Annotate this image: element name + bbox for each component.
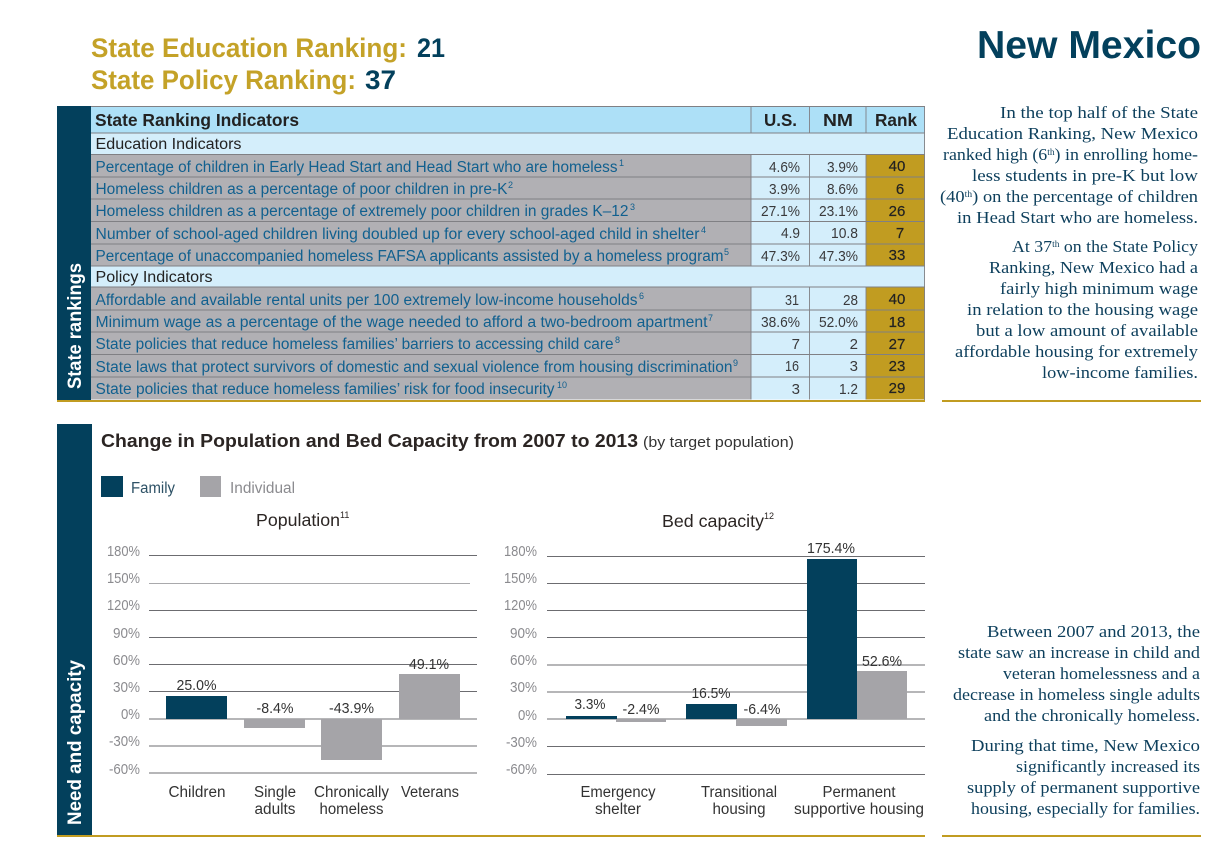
indicator: early head start: 1: [619, 158, 624, 168]
heading: state rankings: 21: [417, 33, 445, 63]
indicator: child care: 7: [792, 336, 800, 353]
text block: state rankings commentary: fairly high minimum wage: [1000, 279, 1198, 298]
indicator: early head start: 4.6%: [769, 159, 800, 176]
indicator: child care: 2: [850, 336, 858, 353]
value labels: 25.0%: [176, 677, 216, 694]
indicator: FAFSA: 5: [724, 247, 729, 257]
category labels: Emergency: [580, 784, 656, 801]
y axis labels: 150%: [504, 570, 537, 587]
indicator: child care: [96, 335, 905, 353]
text block: state rankings commentary: (40: [940, 187, 963, 206]
indicator: food insecurity: State policies that reduce homeless families’ risk for food insecurity: [96, 381, 555, 398]
legend: Individual: [230, 480, 295, 497]
category labels: homeless: [320, 801, 384, 818]
text block: need and capacity commentary: [953, 622, 1201, 818]
y axis labels: -30%: [109, 733, 140, 750]
text block: need and capacity commentary: housing, especially for families.: [971, 799, 1200, 818]
chart title: Population: 11: [340, 510, 349, 520]
indicator: survivors: 3: [850, 358, 858, 375]
indicator: food insecurity: 29: [889, 380, 905, 397]
text block: need and capacity commentary: Between 2007 and 2013, the: [987, 622, 1200, 641]
category labels: Veterans: [401, 784, 459, 801]
indicator: pre-K: [96, 180, 904, 198]
text block: state rankings commentary: in Head Start who are homeless.: [957, 208, 1198, 227]
indicator: grades K-12: 26: [889, 203, 905, 220]
y axis labels: [107, 543, 140, 778]
indicator: rental units: [96, 291, 905, 309]
text block: state rankings commentary: the State Policy: [1086, 237, 1193, 256]
value labels: [574, 540, 902, 718]
indicator: early head start: [96, 158, 905, 176]
heading: state rankings: State Policy Ranking:: [91, 65, 356, 95]
indicator: grades K-12: 3: [630, 202, 635, 212]
text block: state rankings commentary: ): [1055, 145, 1061, 164]
y axis labels: 150%: [107, 570, 140, 587]
chart heading: (by target population): [643, 434, 794, 451]
table header row: NM: [823, 110, 853, 130]
chart title: Bed capacity: Bed capacity: [662, 511, 764, 531]
bar chart: bed capacity: [504, 511, 925, 818]
indicator: grades K-12: [96, 202, 905, 220]
y axis labels: 0%: [121, 706, 140, 723]
heading: state rankings: State Education Ranking:: [91, 33, 407, 63]
indicator: doubled up: Number of school-aged children living doubled up for every school-aged child in shelter: [96, 226, 700, 243]
panel: state rankings table: [57, 106, 925, 402]
text block: state rankings commentary: less students in pre-K but low: [972, 166, 1199, 185]
bars: [566, 559, 907, 726]
indicator: grades K-12: Homeless children as a percentage of extremely poor children in grades K–12: [96, 203, 628, 220]
indicator: doubled up: 4.9: [781, 225, 800, 242]
category labels: supportive housing: [794, 801, 924, 818]
y axis labels: 0%: [518, 707, 537, 724]
value labels: -6.4%: [744, 701, 780, 718]
text block: need and capacity commentary: decrease in homeless single adults: [953, 685, 1200, 704]
indicator: survivors: State laws that protect survivors of domestic and sexual violence from housing discrimination: [96, 359, 732, 376]
text block: need and capacity commentary: veteran homelessness and a: [1003, 664, 1200, 683]
indicator: pre-K: 2: [508, 180, 513, 190]
text block: state rankings commentary: but a low amount of available: [976, 321, 1198, 340]
y axis labels: 180%: [107, 543, 140, 560]
chart heading: Change in Population and Bed Capacity from 2007 to 2013: [101, 430, 638, 451]
chart title: Bed capacity: 12: [764, 511, 774, 521]
indicator: food insecurity: 10: [557, 380, 567, 390]
indicator: survivors: 16: [785, 358, 799, 375]
category labels: Single: [254, 784, 296, 801]
sidebar: Need and capacity: Need and capacity: [65, 660, 86, 825]
heading: state rankings: [91, 33, 445, 95]
table header row: U.S.: [764, 110, 797, 130]
heading: state rankings: 37: [365, 65, 396, 95]
text block: state rankings commentary: ): [972, 187, 978, 206]
indicator: grades K-12: 23.1%: [819, 203, 858, 220]
text block: state rankings commentary: in relation to the housing wage: [967, 300, 1198, 319]
text block: need and capacity commentary: supply of permanent supportive: [967, 778, 1200, 797]
text block: state rankings commentary: [940, 103, 1199, 382]
indicator: rental units: 40: [889, 291, 905, 308]
indicator: FAFSA: Percentage of unaccompanied homeless FAFSA applicants assisted by a homeless program: [96, 248, 724, 265]
indicator: pre-K: 6: [896, 181, 904, 198]
value labels: [176, 656, 449, 717]
indicator: food insecurity: 3: [792, 381, 800, 398]
table header row: State Ranking Indicators: [95, 110, 299, 130]
value labels: 3.3%: [574, 696, 606, 713]
text block: state rankings commentary: th: [1047, 147, 1055, 157]
value labels: -2.4%: [622, 701, 660, 718]
value labels: -43.9%: [329, 700, 374, 717]
indicator: doubled up: [96, 225, 904, 243]
indicator: pre-K: Homeless children as a percentage of poor children in pre-K: [96, 181, 508, 198]
indicator: child care: 27: [889, 336, 905, 353]
indicator: minimum wage: 52.0%: [819, 314, 858, 331]
section label: Policy Indicators: Policy Indicators: [96, 269, 213, 286]
indicator: early head start: Percentage of children in Early Head Start and Head Start who are homeless: [96, 159, 618, 176]
text block: state rankings commentary: th: [965, 189, 973, 199]
y axis labels: 90%: [113, 625, 140, 642]
indicator: early head start: 3.9%: [827, 159, 858, 176]
indicator: pre-K: 8.6%: [827, 181, 858, 198]
indicator: rental units: 6: [639, 291, 644, 301]
sidebar: State rankings: [57, 106, 91, 400]
legend: Family: [131, 480, 175, 497]
text block: state rankings commentary: ranked high (6: [943, 145, 1042, 164]
chart title: Population: Population: [256, 510, 340, 530]
section label: Education Indicators: Education Indicators: [96, 136, 242, 153]
panel: need and capacity: [57, 424, 925, 837]
text block: state rankings commentary: Ranking, New Mexico had a: [989, 258, 1198, 277]
y axis labels: 30%: [113, 679, 140, 696]
text block: state rankings commentary: on: [1059, 237, 1082, 256]
indicator: minimum wage: 18: [889, 314, 905, 331]
y axis labels: 120%: [107, 597, 140, 614]
y axis labels: -60%: [506, 761, 537, 778]
text block: state rankings commentary: Education Ranking, New Mexico: [947, 124, 1198, 143]
indicator: early head start: 40: [889, 158, 905, 175]
text block: state rankings commentary: low-income families.: [1042, 363, 1198, 382]
category labels: [580, 784, 924, 818]
indicator: rental units: Affordable and available rental units per 100 extremely low-income households: [96, 292, 638, 309]
text block: state rankings commentary: th: [1052, 239, 1060, 249]
indicator: minimum wage: 38.6%: [761, 314, 800, 331]
indicator: FAFSA: 33: [889, 247, 905, 264]
text block: need and capacity commentary: state saw an increase in child and: [958, 643, 1201, 662]
text block: need and capacity commentary: During that time, New Mexico: [971, 736, 1200, 755]
y axis labels: 120%: [504, 597, 537, 614]
indicator: FAFSA: 47.3%: [819, 248, 858, 265]
y axis labels: 90%: [510, 625, 537, 642]
title: New Mexico: New Mexico: [977, 24, 1201, 67]
category labels: [168, 784, 459, 818]
indicator: rental units: 31: [785, 292, 799, 309]
category labels: Chronically: [314, 784, 389, 801]
value labels: 175.4%: [807, 540, 855, 557]
bars: [166, 674, 460, 760]
category labels: housing: [712, 801, 766, 818]
y axis labels: 30%: [510, 679, 537, 696]
y axis labels: [504, 543, 537, 778]
indicator: child care: 8: [615, 335, 620, 345]
indicator: FAFSA: 47.3%: [761, 248, 800, 265]
y axis labels: -30%: [506, 734, 537, 751]
y axis labels: 180%: [504, 543, 537, 560]
y axis labels: 60%: [113, 652, 140, 669]
text block: state rankings commentary: In the top half of the State: [1000, 103, 1198, 122]
text block: state rankings commentary: At 37: [1012, 237, 1050, 256]
indicator: survivors: 23: [889, 358, 905, 375]
text block: state rankings commentary: in enrolling home-: [1065, 145, 1191, 164]
indicator: minimum wage: 7: [708, 313, 713, 323]
value labels: -8.4%: [256, 700, 294, 717]
indicator: rental units: 28: [843, 292, 858, 309]
text block: state rankings commentary: on the percentage of children: [983, 187, 1181, 206]
indicator: child care: State policies that reduce homeless families’ barriers to accessing child care: [96, 336, 614, 353]
indicator: food insecurity: [96, 380, 905, 398]
category labels: shelter: [595, 801, 641, 818]
legend: [101, 476, 295, 497]
category labels: adults: [254, 801, 296, 818]
value labels: 49.1%: [409, 656, 449, 673]
indicator: grades K-12: 27.1%: [761, 203, 800, 220]
sidebar: Need and capacity: [57, 424, 92, 835]
indicator: survivors: 9: [733, 358, 738, 368]
y axis labels: -60%: [109, 761, 140, 778]
sidebar: State rankings: State rankings: [65, 263, 86, 389]
y axis labels: 60%: [510, 652, 537, 669]
category labels: Permanent: [822, 784, 896, 801]
category labels: Transitional: [701, 784, 777, 801]
indicator: minimum wage: Minimum wage as a percentage of the wage needed to afford a two-bedroom apartment: [96, 314, 708, 331]
indicator: doubled up: 4: [701, 225, 706, 235]
category labels: Children: [168, 784, 226, 801]
value labels: 52.6%: [862, 653, 902, 670]
bar chart: population: [107, 510, 477, 818]
text block: need and capacity commentary: and the chronically homeless.: [984, 706, 1200, 725]
indicator: doubled up: 10.8: [831, 225, 858, 242]
indicator: pre-K: 3.9%: [769, 181, 800, 198]
indicator: doubled up: 7: [896, 225, 904, 242]
text block: state rankings commentary: affordable housing for extremely: [955, 342, 1199, 361]
table header row: Rank: [875, 110, 917, 130]
indicator: food insecurity: 1.2: [839, 381, 858, 398]
value labels: 16.5%: [692, 685, 730, 702]
text block: need and capacity commentary: significantly increased its: [1016, 757, 1200, 776]
table header row: [95, 110, 917, 130]
